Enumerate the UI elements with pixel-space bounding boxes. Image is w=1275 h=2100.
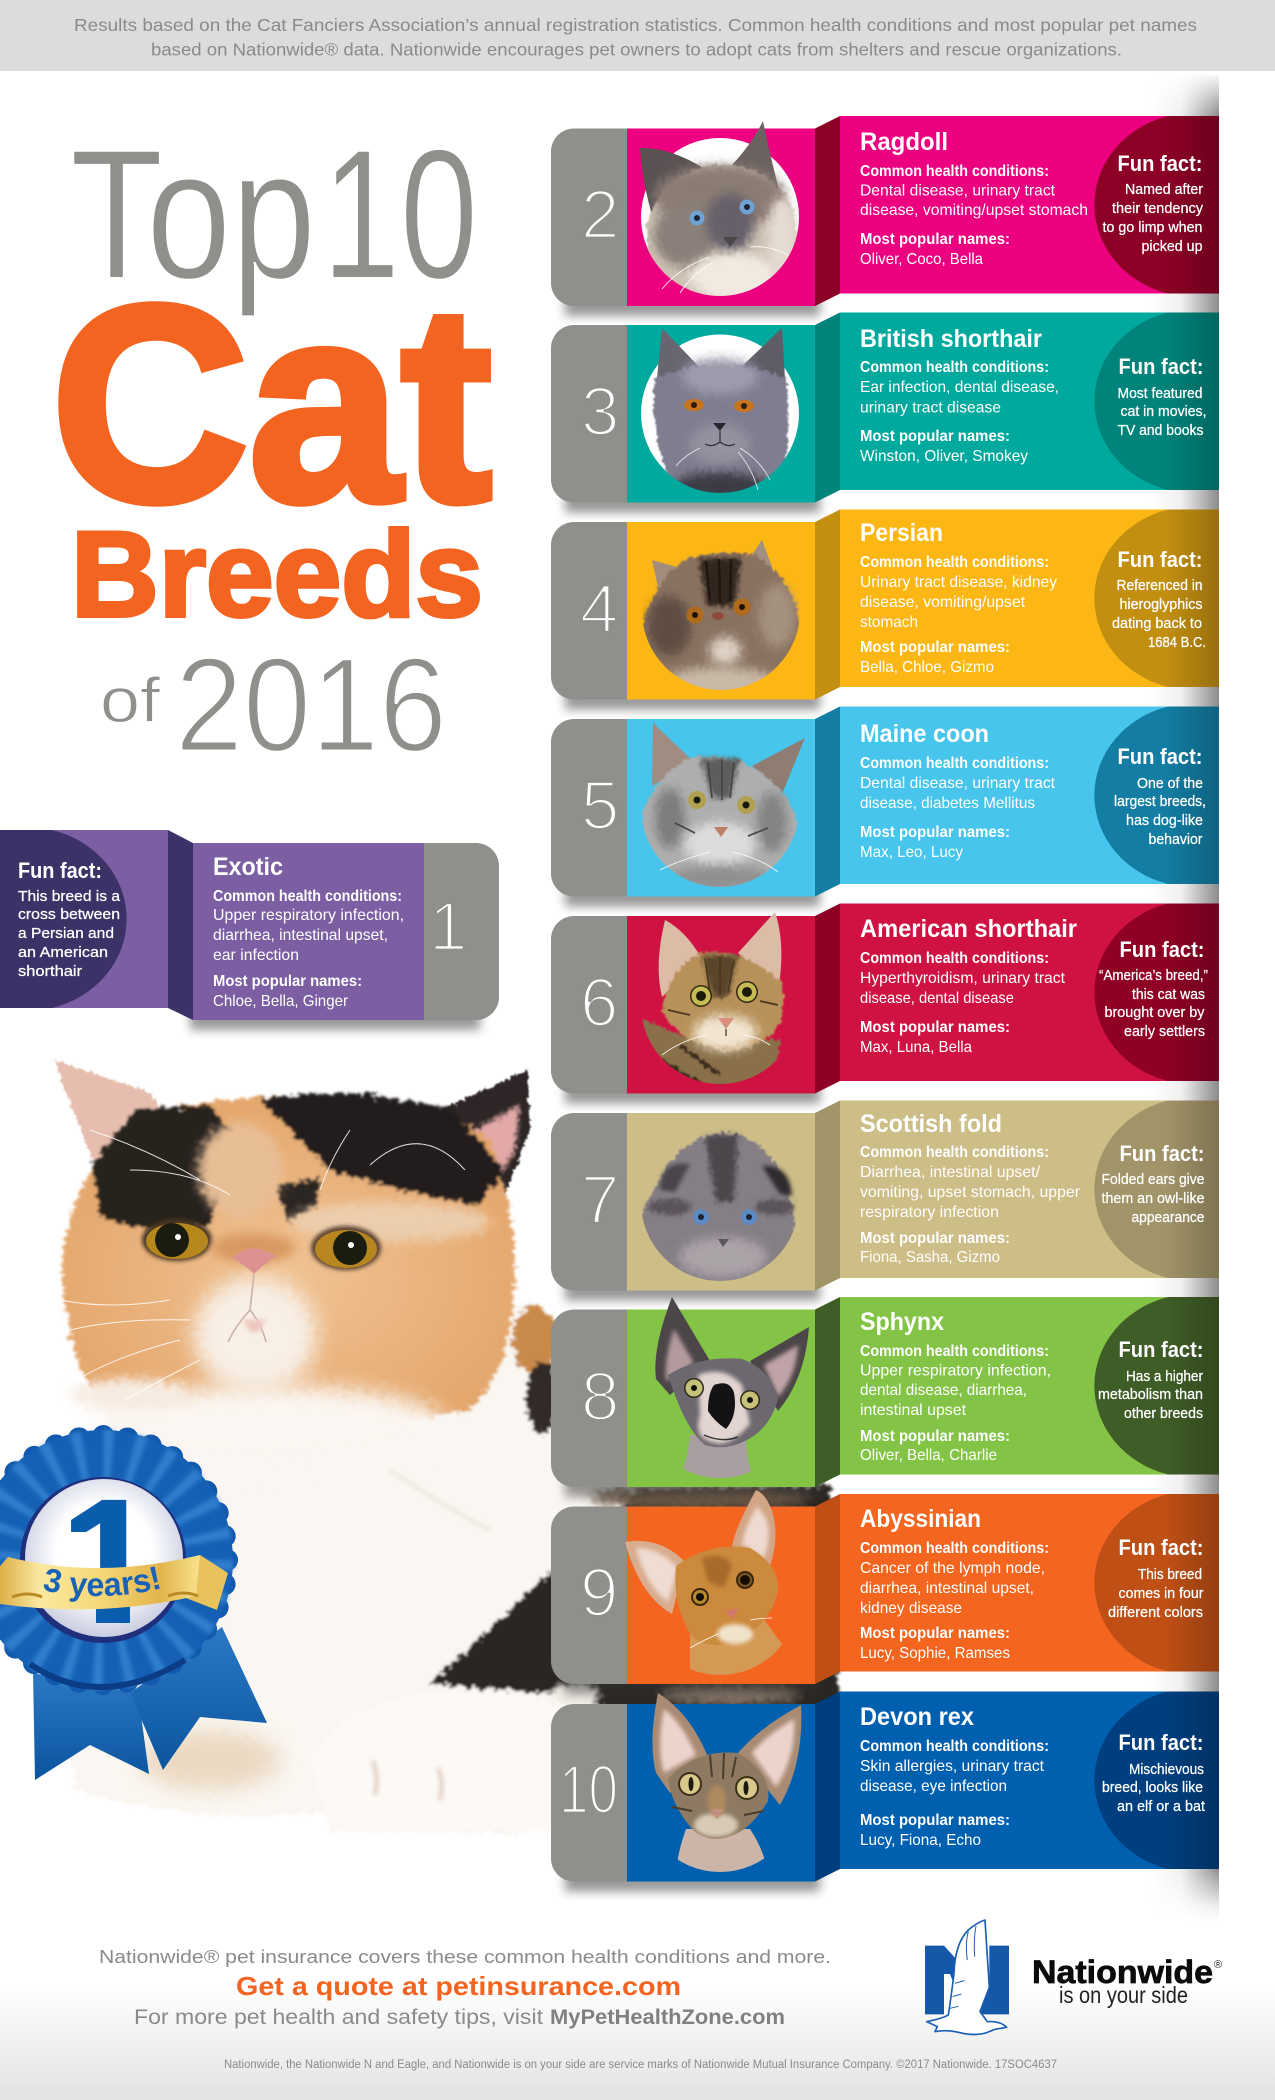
health conditions: Common health conditions: (860, 163, 1049, 180)
health conditions: kidney disease (860, 1600, 962, 1617)
breed name: Persian (860, 519, 943, 547)
popular names (860, 1230, 1010, 1266)
rosette (0, 1434, 229, 1687)
rank number: 2 (581, 176, 619, 253)
icon: american shorthair cat (638, 912, 784, 1089)
fun fact: “America’s breed,” (1099, 968, 1208, 984)
icon: scottish fold kitten (640, 1132, 795, 1286)
wordmark: is on your side (1059, 1982, 1188, 2008)
health conditions: disease, eye infection (860, 1778, 1007, 1795)
fun fact: 1684 B.C. (1148, 635, 1206, 651)
panel: rank 5 Maine coon (551, 706, 1219, 913)
legal footnote: Nationwide, the Nationwide N and Eagle, and Nationwide is on your side are service marks of Nationwide Mutual Insurance Company. ©2017 Nationwide. 17SOC4637 (224, 2059, 1057, 2071)
health conditions: Ear infection, dental disease, (860, 379, 1059, 396)
fun fact: Fun fact: (1118, 1730, 1204, 1755)
fun fact: Fun fact: (1118, 354, 1204, 379)
health conditions: Dental disease, urinary tract (860, 182, 1056, 200)
health conditions (860, 1738, 1049, 1795)
fun fact: Fun fact: (1120, 1141, 1204, 1166)
fun fact (1108, 1535, 1204, 1621)
wordmark: ® (1214, 1959, 1222, 1971)
rank number: 3 (581, 373, 619, 450)
panel: rank 3 British shorthair (551, 312, 1219, 512)
fun fact: Fun fact: (1118, 1535, 1204, 1560)
popular names: Most popular names: (860, 1428, 1010, 1445)
fun fact (1098, 1337, 1204, 1422)
popular names: Most popular names: (860, 639, 1010, 656)
health conditions: Upper respiratory infection, (213, 907, 404, 924)
breed name: American shorthair (860, 915, 1077, 943)
panel: rank 9 Abyssinian (551, 1490, 1219, 1700)
footer call to action (99, 1946, 831, 2029)
popular names: Most popular names: (860, 824, 1010, 841)
gold banner: 3 years! (44, 1566, 160, 1602)
health conditions: diarrhea, intestinal upset, (860, 1580, 1034, 1597)
fun fact: TV and books (1118, 423, 1204, 439)
fun fact: metabolism than (1098, 1387, 1203, 1403)
fun fact: largest breeds, (1114, 794, 1206, 810)
popular names: Most popular names: (860, 231, 1010, 248)
fun fact: has dog-like (1126, 813, 1203, 829)
fun fact: other breeds (1124, 1406, 1203, 1422)
health conditions: Hyperthyroidism, urinary tract (860, 970, 1066, 987)
fun fact: Fun fact: (1118, 1337, 1204, 1362)
fun fact: a Persian and (18, 926, 114, 942)
popular names: Oliver, Coco, Bella (860, 251, 983, 268)
popular names: Chloe, Bella, Ginger (213, 993, 349, 1010)
health conditions (860, 1144, 1081, 1221)
health conditions (860, 1343, 1051, 1419)
title: 2016 (175, 631, 447, 780)
rank number: 6 (580, 964, 618, 1041)
popular names: Most popular names: (860, 428, 1010, 445)
fun fact: Referenced in (1116, 578, 1203, 594)
fun fact: One of the (1137, 776, 1203, 792)
health conditions (860, 163, 1088, 219)
health conditions: Common health conditions: (860, 755, 1049, 772)
title: Cat (51, 248, 492, 560)
fun fact (1102, 151, 1204, 255)
fun fact: brought over by (1104, 1005, 1205, 1021)
popular names (860, 1428, 1010, 1464)
fun fact: this cat was (1132, 987, 1205, 1003)
fun fact (1102, 1141, 1205, 1226)
fun fact: Named after (1125, 182, 1203, 198)
header note band (0, 0, 1275, 71)
header note band: based on Nationwide® data. Nationwide encourages pet owners to adopt cats from shelters and rescue organizations. (151, 40, 1122, 60)
fun fact: them an owl-like (1102, 1191, 1205, 1207)
popular names: Bella, Chloe, Gizmo (860, 659, 994, 676)
fun fact: behavior (1148, 832, 1203, 848)
breed name: Sphynx (860, 1308, 944, 1336)
breed name: Maine coon (860, 720, 989, 748)
gold banner (0, 1555, 228, 1610)
fun fact (1114, 744, 1206, 848)
fun fact: an American (18, 945, 108, 961)
health conditions: Common health conditions: (860, 1144, 1049, 1161)
badge: blue rosette 1 3 years (0, 1425, 267, 1780)
fun fact: This breed is a (18, 889, 120, 905)
fun fact: comes in four (1118, 1586, 1204, 1602)
fun fact: different colors (1108, 1605, 1203, 1621)
footer call to action: Get a quote at petinsurance.com (236, 1971, 681, 2001)
health conditions: disease, vomiting/upset (860, 594, 1026, 611)
fun fact: appearance (1132, 1210, 1205, 1226)
breed name: Devon rex (860, 1703, 974, 1731)
icon: devon rex cat (652, 1693, 801, 1877)
health conditions: ear infection (213, 947, 299, 964)
health conditions: Common health conditions: (860, 359, 1049, 376)
icon: maine coon cat (642, 723, 805, 892)
title: of (100, 666, 161, 736)
health conditions: respiratory infection (860, 1204, 999, 1221)
fun fact: Folded ears give (1102, 1172, 1205, 1188)
rank number: 10 (559, 1751, 618, 1828)
health conditions: stomach (860, 614, 918, 631)
fun fact: to go limp when (1102, 220, 1203, 236)
fun fact: picked up (1142, 239, 1203, 255)
cat eyes (142, 1219, 381, 1270)
health conditions: disease, vomiting/upset stomach (860, 202, 1088, 219)
title: Breeds (71, 506, 483, 642)
health conditions (860, 950, 1066, 1007)
fun fact: early settlers (1124, 1024, 1205, 1040)
panel: rank 7 Scottish fold (551, 1100, 1219, 1307)
fun fact: shorthair (18, 964, 82, 980)
fun fact (18, 858, 120, 980)
wordmark: Nationwide (1032, 1954, 1213, 1990)
panel: rank 2 Ragdoll (551, 116, 1219, 316)
health conditions: Diarrhea, intestinal upset/ (860, 1164, 1041, 1181)
cat ears (54, 1060, 530, 1220)
health conditions: urinary tract disease (860, 400, 1001, 416)
fun fact (1112, 547, 1206, 651)
health conditions: Skin allergies, urinary tract (860, 1758, 1045, 1775)
rank number: 7 (581, 1161, 619, 1238)
health conditions: Common health conditions: (860, 554, 1049, 571)
health conditions: Common health conditions: (860, 1540, 1049, 1557)
breed name: Scottish fold (860, 1110, 1002, 1138)
icon: sphynx cat (655, 1297, 809, 1483)
popular names (860, 1019, 1010, 1056)
health conditions: intestinal upset (860, 1402, 967, 1419)
health conditions: Upper respiratory infection, (860, 1362, 1051, 1380)
popular names (860, 824, 1010, 861)
popular names: Most popular names: (860, 1812, 1010, 1829)
health conditions (213, 888, 404, 964)
title: 10 (322, 112, 478, 318)
fun fact: dating back to (1112, 616, 1202, 632)
popular names (213, 973, 362, 1010)
icon: british shorthair cat (654, 328, 788, 500)
fun fact: Fun fact: (18, 858, 102, 883)
right page curl shadow (1150, 72, 1220, 1922)
health conditions: diarrhea, intestinal upset, (213, 927, 388, 944)
popular names (860, 639, 1010, 676)
health conditions: Cancer of the lymph node, (860, 1560, 1045, 1577)
fun fact: cat in movies, (1120, 404, 1206, 420)
popular names (860, 428, 1028, 465)
popular names (860, 231, 1010, 268)
popular names (860, 1625, 1010, 1662)
fun fact: cross between (18, 907, 120, 923)
panel: rank 1 Exotic (0, 830, 499, 1030)
breed name: British shorthair (860, 325, 1042, 353)
cat whiskers (60, 1130, 465, 1400)
popular names: Winston, Oliver, Smokey (860, 448, 1028, 465)
popular names: Max, Leo, Lucy (860, 844, 963, 861)
popular names: Lucy, Sophie, Ramses (860, 1645, 1010, 1662)
health conditions (860, 359, 1059, 416)
health conditions: dental disease, diarrhea, (860, 1382, 1027, 1399)
rank number: 4 (580, 570, 618, 647)
cat nose and mouth (211, 1233, 295, 1342)
breed name: Abyssinian (860, 1505, 981, 1533)
white dome: 1 (60, 1464, 158, 1660)
popular names: Most popular names: (860, 1230, 1010, 1247)
wordmark (1032, 1954, 1222, 2008)
photo: large calico exotic cat (54, 1060, 840, 1834)
icon: abyssinian cat (625, 1490, 782, 1680)
health conditions: disease, dental disease (860, 990, 1014, 1007)
popular names: Most popular names: (860, 1019, 1010, 1036)
health conditions: Dental disease, urinary tract (860, 775, 1056, 792)
fun fact: Most featured (1118, 386, 1203, 402)
popular names: Max, Luna, Bella (860, 1039, 972, 1056)
breed name: Ragdoll (860, 128, 948, 156)
icon: ragdoll cat (640, 121, 799, 301)
fun fact: Fun fact: (1118, 151, 1202, 176)
health conditions: Common health conditions: (860, 950, 1049, 967)
health conditions: vomiting, upset stomach, upper (860, 1184, 1081, 1201)
panel: rank 10 Devon rex (551, 1692, 1219, 1898)
footer call to action: MyPetHealthZone.com (550, 2006, 785, 2029)
health conditions (860, 1540, 1049, 1617)
footer call to action: For more pet health and safety tips, visit (134, 2006, 543, 2029)
fun fact: Mischievous (1129, 1762, 1204, 1778)
panel: rank 6 American shorthair (551, 904, 1219, 1110)
fun fact: This breed (1138, 1567, 1202, 1583)
fun fact: hieroglyphics (1120, 597, 1202, 613)
rank number: 5 (581, 767, 619, 844)
health conditions: Urinary tract disease, kidney (860, 574, 1057, 591)
fun fact: Fun fact: (1120, 937, 1204, 962)
health conditions: Common health conditions: (213, 888, 402, 905)
footer call to action: Nationwide® pet insurance covers these common health conditions and more. (99, 1946, 831, 1967)
popular names (860, 1812, 1010, 1849)
rank number: 9 (580, 1554, 618, 1631)
footer background (0, 1985, 1275, 2100)
fun fact (1099, 937, 1208, 1040)
ribbon tails (33, 1627, 267, 1780)
fun fact (1118, 354, 1206, 439)
popular names: Oliver, Bella, Charlie (860, 1447, 997, 1464)
panel: rank 4 Persian (551, 510, 1219, 716)
title (51, 112, 492, 780)
fun fact: Has a higher (1126, 1369, 1203, 1385)
fun fact: Fun fact: (1118, 547, 1202, 572)
panel: rank 8 Sphynx (551, 1297, 1219, 1504)
white dome (20, 1477, 186, 1643)
popular names: Most popular names: (213, 973, 362, 990)
health conditions: Common health conditions: (860, 1738, 1049, 1755)
fun fact: their tendency (1112, 201, 1204, 217)
health conditions: disease, diabetes Mellitus (860, 795, 1035, 812)
rank number: 8 (581, 1358, 619, 1435)
header note band: Results based on the Cat Fanciers Association’s annual registration statistics. Common health conditions and most popular pet names (74, 15, 1197, 35)
popular names: Most popular names: (860, 1625, 1010, 1642)
breed name: Exotic (213, 853, 283, 881)
fun fact: Fun fact: (1118, 744, 1202, 769)
health conditions: Common health conditions: (860, 1343, 1049, 1360)
title: Top (70, 112, 316, 318)
popular names: Fiona, Sasha, Gizmo (860, 1249, 1000, 1266)
icon: persian cat (641, 540, 801, 699)
health conditions (860, 755, 1056, 812)
cat head (62, 1092, 515, 1465)
rank number: 1 (429, 888, 467, 965)
fun fact (1102, 1730, 1205, 1815)
health conditions (860, 554, 1057, 631)
logo: Nationwide N and eagle (925, 1920, 1222, 2034)
popular names: Lucy, Fiona, Echo (860, 1832, 981, 1849)
fun fact: an elf or a bat (1117, 1799, 1205, 1815)
fun fact: breed, looks like (1102, 1780, 1203, 1796)
